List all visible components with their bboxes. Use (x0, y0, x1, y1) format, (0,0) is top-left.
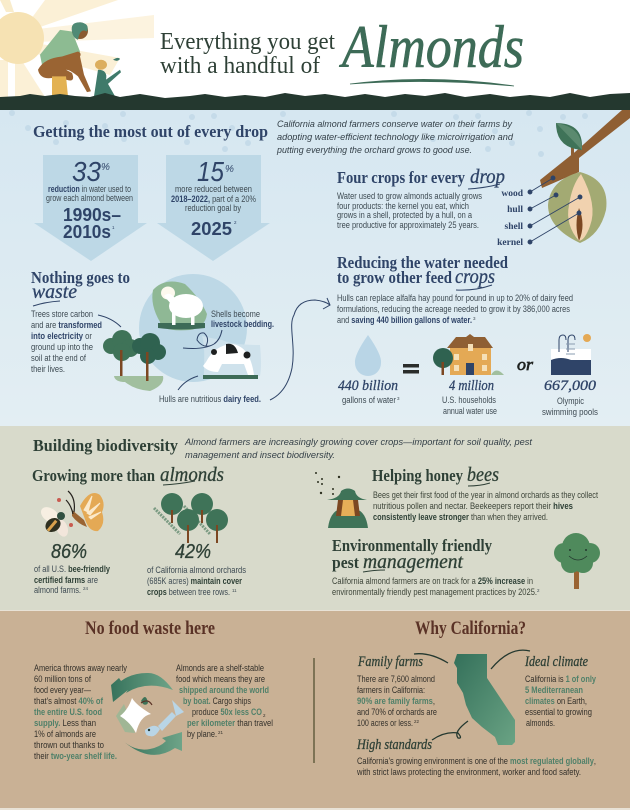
stat: 440 billion gallons: 3 (397, 396, 400, 401)
stat: 440 billion gallons (338, 335, 400, 405)
stat arrow: 15%: 2025 (191, 218, 232, 239)
stat arrow: 33%: 1990s– (63, 204, 121, 225)
connector: high standards (432, 721, 468, 740)
stat: 42%: crops between tree rows. (147, 587, 230, 597)
text: trees: ground up into the (31, 342, 93, 352)
heading: Nothing goes to waste: waste (32, 281, 77, 303)
heading: Environmentally friendly pest management: Environmentally friendly (332, 536, 492, 555)
stat: 86%: certified farms are (34, 575, 98, 585)
text: four crops: tree productive for approximately 25 years. (337, 220, 479, 230)
text: ideal climate: 5 Mediterranean (525, 685, 583, 695)
text: hulls replace alfalfa (337, 293, 573, 325)
stat arrow: 33%: reduction in water used to (48, 184, 131, 194)
text: pest management: California almond farmers are on track for a 25% increase in (332, 576, 533, 586)
text: high standards: California's growing environment is one of the most regulated globally, (357, 756, 596, 766)
text: food waste right: 2 (263, 713, 266, 718)
title (160, 29, 335, 79)
heading: Environmentally friendly pest management: management (363, 551, 463, 573)
text: family farms: 90% are family farms, (357, 696, 435, 706)
connector: family farms (414, 654, 448, 663)
icon: sun with rays (0, 0, 154, 97)
stat arrow: 15%: 15 (197, 156, 224, 187)
text: food waste right: shipped around the world (179, 685, 269, 695)
stat: 42%: 11 (232, 588, 237, 593)
heading: Growing more than almonds (32, 464, 224, 486)
stat: 4 million households: annual water use (443, 406, 497, 416)
stat arrow: 33%: 33 (72, 156, 101, 187)
icon: bee and butterfly (38, 491, 104, 538)
text: hulls replace alfalfa: formulations, reducing the acreage needed to grow it by 386,000 acres (337, 304, 571, 314)
stat arrow: 33%: % (101, 162, 110, 173)
icon: almond branch diagram: kernel (497, 238, 523, 248)
stat arrow: 15% (157, 155, 270, 261)
stat arrow: 15%: reduction goal by (185, 203, 242, 213)
stat arrow: 15%: 2018–2022, part of a 20% (171, 194, 256, 204)
text: food waste left (34, 663, 128, 761)
panel: water section (0, 110, 630, 426)
text: helping honey bees: consistently leave stronger than when they arrived. (373, 512, 548, 522)
text: four crops: four products: the kernel you eat, which (337, 201, 469, 211)
stat: 42%: of California almond orchards (147, 565, 247, 575)
stat: 86% (34, 541, 110, 595)
text: food waste right: produce 50x less CO (192, 707, 262, 717)
text: high standards: with strict laws protecting the environment, worker and food safety. (356, 767, 581, 777)
text: trees: Trees store carbon (31, 309, 93, 319)
stat: 86%: 86% (51, 541, 87, 563)
word: or: or (517, 355, 533, 374)
stat: 440 billion gallons: 440 billion (338, 378, 398, 394)
heading: Building biodiversity: Building biodiversity (33, 436, 178, 455)
stat arrow: 33%: grow each almond between (46, 193, 133, 203)
heading: Reducing the water needed: to grow other feed (337, 268, 452, 287)
text: four crops: grows in a shell, protected by a hull, on a (337, 210, 472, 220)
connector: ideal climate (491, 650, 530, 669)
stat: 667,000 pools: swimming pools (542, 407, 599, 417)
heading: Reducing the water needed (337, 253, 508, 290)
intro text (276, 119, 514, 156)
stat: 42%: (685K acres) maintain cover (147, 576, 242, 586)
text: food waste right: by boat. Cargo ships (183, 696, 251, 706)
text: hulls replace alfalfa: Hulls can replace alfalfa hay pound for pound in up to 20% of dairy feed (337, 293, 573, 303)
text: trees: their lives. (31, 364, 65, 374)
stat: 86%: of all U.S. bee-friendly (34, 564, 110, 574)
icon: almond branch diagram: shell (505, 222, 523, 232)
stat: 667,000 pools (542, 334, 599, 417)
heading: Environmentally friendly pest management (332, 536, 492, 573)
panel: bottom tan section (0, 610, 630, 810)
text: ideal climate: climates on Earth, (525, 696, 587, 706)
stat arrow: 15%: % (225, 164, 234, 175)
stat: 86%: almond farms. (34, 585, 81, 595)
stat: 667,000 pools: 667,000 (544, 378, 597, 394)
text: hulls replace alfalfa: and saving 440 billion gallons of water. (337, 315, 472, 325)
header background (0, 0, 630, 100)
dark grass band (0, 93, 630, 114)
stat arrow: 33% (34, 155, 147, 261)
text: trees (31, 309, 102, 374)
text: food waste left: their two-year shelf life. (34, 751, 117, 761)
icon: apple core and fish bones (116, 697, 184, 736)
text: family farms: 100 acres or less. (357, 718, 413, 728)
heading: No food waste here: No food waste here (85, 618, 215, 639)
heading: Why California?: Why California? (415, 618, 526, 639)
text: trees: into electricity or (31, 331, 92, 341)
intro text: California almond farmers conserve water on their farms by (277, 119, 513, 130)
text: hulls: Hulls are nutritious dairy feed. (159, 394, 261, 404)
text: shells: livestock bedding. (211, 319, 274, 329)
text: family farms (357, 654, 437, 728)
text: ideal climate: California is 1 of only (525, 674, 596, 684)
text: family farms: There are 7,600 almond (357, 674, 435, 684)
text: hulls replace alfalfa: 3 (473, 316, 476, 321)
text: food waste left: thrown out thanks to (34, 740, 104, 750)
arrow: recycle top (111, 673, 173, 702)
stat: 86%: 24 (83, 586, 89, 591)
text: ideal climate: almonds. (526, 718, 555, 728)
text: food waste right (176, 663, 273, 739)
equals sign (403, 364, 419, 374)
map: California (454, 654, 515, 745)
heading: Environmentally friendly pest management: pest (332, 553, 359, 572)
illustration: circle with trees, sheep and cow (98, 274, 261, 391)
heading: Four crops for every drop: Four crops for every (337, 168, 465, 187)
icon: almond branch diagram: wood (501, 189, 524, 199)
text: food waste left: America throws away nearly (34, 663, 128, 673)
text: food waste left: 1% of almonds are (34, 729, 96, 739)
text: pest management: environmentally friendly pest management practices by 2025. (332, 587, 537, 597)
icon: beekeeper with bees (315, 472, 368, 528)
text: pest management: 2 (537, 588, 540, 593)
text: helping honey bees: nutritious pollen and nectar. Beekeepers report their hives (373, 501, 573, 511)
text: food waste left: supply. Less than (34, 718, 96, 728)
intro text: adopting water-efficient technology like microirrigation and (277, 132, 514, 143)
stat: 440 billion gallons: gallons of water (342, 395, 396, 405)
heading: Nothing goes to waste (31, 268, 130, 306)
stat: 667,000 pools: Olympic (557, 396, 585, 406)
text: high standards (356, 737, 596, 777)
intro text: biodiversity (184, 437, 532, 461)
text: food waste right: Almonds are a shelf-stable (176, 663, 264, 673)
stat arrow: 33%: 1 (112, 225, 115, 230)
heading: Helping honey bees: bees (467, 464, 499, 486)
text: food waste left: the entire U.S. food (34, 707, 102, 717)
text: shells (211, 309, 274, 329)
heading: Growing more than almonds: almonds (160, 464, 224, 486)
heading: Nothing goes to waste: Nothing goes to (31, 268, 130, 287)
arrow: hulls to feed crops (270, 298, 330, 400)
stat: 4 million households: U.S. households (442, 395, 496, 405)
icon: almond branch diagram: hull (507, 205, 523, 215)
stat: 42%: 42% (175, 541, 211, 563)
text: food waste right: food which means they are (176, 674, 265, 684)
text: family farms: and 70% of orchards are (357, 707, 437, 717)
heading: Getting the most out of every drop: Getting the most out of every drop (33, 122, 268, 141)
title: with a handful of (160, 53, 320, 79)
title script word: Almonds: Almonds (339, 14, 524, 80)
heading: Reducing the water needed: Reducing the water needed (337, 253, 508, 272)
title: Everything you get (160, 29, 335, 55)
stat: 42% (147, 541, 247, 597)
text: shells: Shells become (211, 309, 260, 319)
text: trees: soil at the end of (31, 353, 86, 363)
text: ideal climate: Ideal climate (524, 654, 588, 670)
text: four crops (337, 191, 483, 230)
heading: Four crops for every drop: drop (470, 166, 505, 188)
text: food waste left: food every year— (34, 685, 91, 695)
text: food waste left: 60 million tons of (34, 674, 91, 684)
stat: 4 million households: 4 million (449, 378, 494, 394)
text: family farms: Family farms (357, 654, 423, 670)
text: ideal climate (524, 654, 596, 728)
divider (313, 658, 315, 763)
text: family farms: 22 (414, 719, 420, 724)
text: food waste right: 21 (218, 730, 224, 735)
icon: almond branch diagram (497, 110, 630, 248)
heading: Helping honey bees: Helping honey (372, 466, 463, 485)
stat arrow: 15%: more reduced between (175, 184, 252, 194)
text: food waste right: per kilometer than travel (187, 718, 273, 728)
text: high standards: High standards (356, 737, 432, 753)
intro text: biodiversity: management and insect biodiversity. (185, 450, 335, 461)
heading: Growing more than almonds: Growing more than (32, 466, 155, 485)
stat arrow: 33%: 2010s (63, 221, 111, 242)
icon: smiling tree (554, 533, 600, 589)
icon: farmer crouching with child (38, 22, 121, 96)
text: trees: and are transformed (31, 320, 102, 330)
intro text: biodiversity: Almond farmers are increasingly growing cover crops—important for soil quality, pest (184, 437, 532, 448)
icon: trees with cover crops (154, 493, 228, 543)
text: pest management (332, 576, 540, 597)
text: four crops: Water used to grow almonds actually grows (337, 191, 483, 201)
arrow: recycle bottom (122, 732, 182, 755)
text: food waste right: by plane. (187, 729, 217, 739)
text: helping honey bees (373, 490, 598, 522)
text: family farms: farmers in California: (357, 685, 425, 695)
stat arrow: 15%: 2 (234, 220, 237, 225)
panel: biodiversity section (0, 426, 630, 610)
heading: Reducing the water needed: crops (455, 266, 495, 288)
intro text: putting everything the orchard grows to good use. (276, 145, 472, 156)
text: ideal climate: essential to growing (525, 707, 592, 717)
stat: 4 million households (433, 334, 504, 416)
text: food waste left: that's almost 40% of (34, 696, 103, 706)
